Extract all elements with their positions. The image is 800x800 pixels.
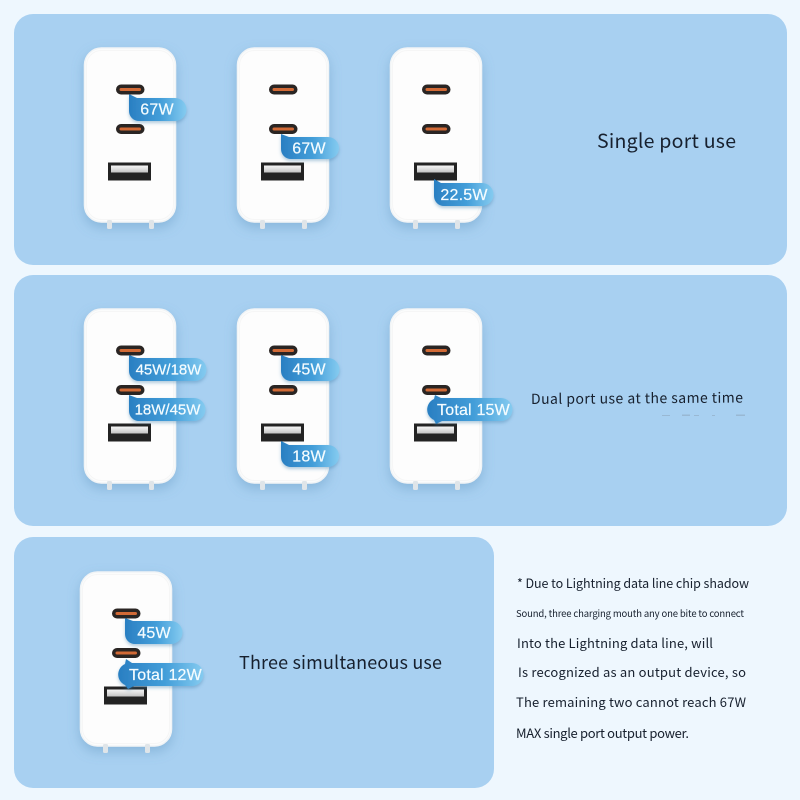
faint cropped text remnant (662, 414, 745, 416)
charger 3 with 22.5W on USB-A port: 22.5W (440, 187, 488, 204)
label: three simultaneous use: Three simultaneous use (239, 649, 442, 675)
footnote text block: Is recognized as an output device, so (518, 662, 746, 681)
charger 5 with 45W and 18W: 45W (292, 362, 326, 378)
panel: single port use (14, 14, 787, 265)
charger 6 with total 15W (390, 309, 512, 490)
charger 4 with 45W/18W and 18W/45W (84, 309, 206, 490)
charger 2 with 67W on lower USB-C port (238, 48, 339, 229)
charger 4 with 45W/18W and 18W/45W: 18W/45W (135, 402, 201, 418)
footnote text block: The remaining two cannot reach 67W (516, 692, 747, 711)
charger 7 with 45W and total 12W (80, 572, 204, 753)
footnote text block: Sound, three charging mouth any one bite to connect (516, 606, 744, 620)
label: dual port use: Dual port use at the same time (531, 388, 743, 409)
label: single port use: Single port use (597, 125, 736, 154)
panel: dual port use (14, 275, 787, 526)
charger 4 with 45W/18W and 18W/45W: 45W/18W (136, 362, 202, 378)
charger 3 with 22.5W on USB-A port (390, 48, 494, 229)
charger 1 with 67W on top USB-C port: 67W (140, 102, 174, 118)
footnote text block: Into the Lightning data line, will (517, 633, 713, 652)
charger 2 with 67W on lower USB-C port: 67W (292, 140, 326, 158)
charger 6 with total 15W: Total 15W (437, 402, 511, 419)
footnote text block: * Due to Lightning data line chip shadow (517, 573, 749, 592)
charger 5 with 45W and 18W: 18W (292, 448, 326, 466)
charger 1 with 67W on top USB-C port (84, 48, 186, 229)
panel: three simultaneous use (14, 537, 494, 788)
charger 7 with 45W and total 12W: 45W (137, 625, 171, 642)
footnote text block (516, 573, 749, 742)
charger 5 with 45W and 18W (238, 309, 340, 490)
footnote text block: MAX single port output power. (516, 723, 689, 742)
charger 7 with 45W and total 12W: Total 12W (129, 667, 203, 684)
